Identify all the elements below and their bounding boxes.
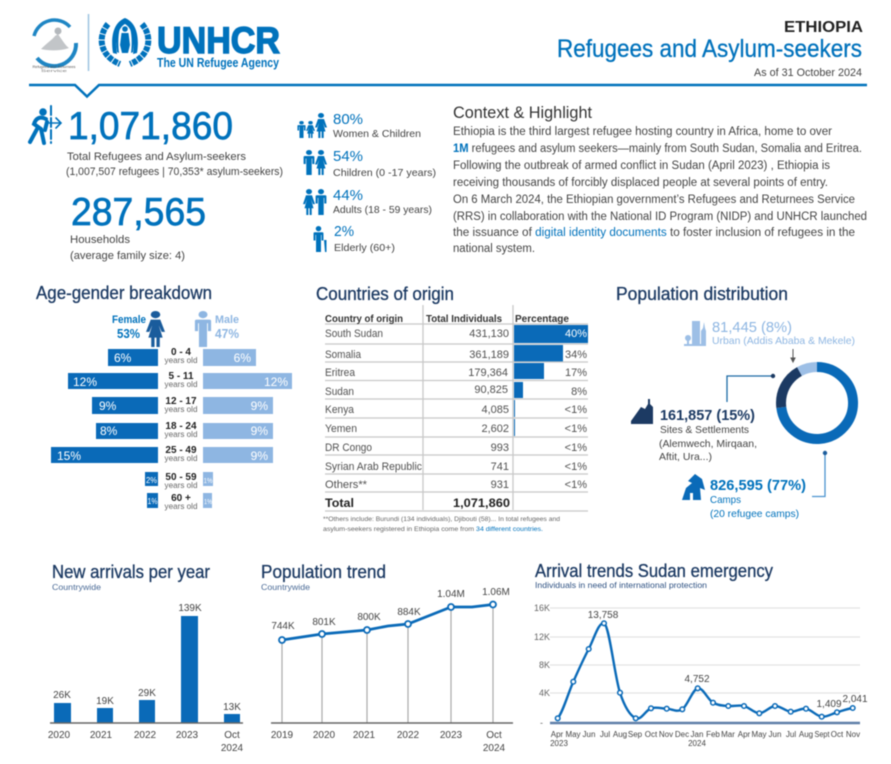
bar chart: arrivals: 2024 [221, 743, 244, 754]
stat: elderly [334, 223, 395, 254]
heading: population trend [261, 562, 386, 592]
icon: camps [682, 474, 705, 500]
logo: refugees and returnees service: Refugees and Returnees [32, 64, 76, 69]
table rows: 361,189 [469, 349, 509, 361]
table rows: Yemen [325, 423, 357, 435]
heading: new arrivals: New arrivals per year [52, 562, 210, 582]
female bars [51, 349, 158, 508]
line chart: population [271, 587, 513, 754]
context and highlight text: On 6 March 2024, the Ethiopian government’s Refugees and Returnees Service [453, 194, 855, 206]
line chart: sudan arrivals: Dec [675, 730, 689, 739]
stat: children: 54% [333, 148, 363, 165]
heading: new arrivals: Countrywide [52, 583, 102, 592]
bar chart: arrivals: 26K [53, 690, 71, 701]
bar chart: arrivals: 19K [96, 696, 114, 707]
panel: population trend [261, 562, 513, 754]
logo: UNHCR emblem [102, 18, 148, 64]
table rows: <1% [565, 404, 587, 416]
logo: UNHCR wordmark: The UN Refugee Agency [157, 56, 279, 70]
label: sites and settlements: Sites & Settlements [660, 424, 749, 436]
table rows: Somalia [325, 349, 362, 361]
line chart: population: 884K [397, 607, 421, 618]
table rows: 40% [565, 328, 587, 340]
bar chart: arrivals: 2021 [90, 730, 113, 741]
line chart: sudan arrivals [534, 603, 868, 748]
label: urban: Urban (Addis Ababa & Mekele) [712, 335, 855, 347]
table grid [325, 305, 588, 511]
table rows: Total [325, 496, 354, 510]
table rows: 431,130 [469, 328, 509, 340]
line chart: sudan arrivals: - [540, 718, 543, 728]
line chart: sudan arrivals: 2023 [550, 739, 568, 748]
table header: Country of origin [325, 313, 403, 325]
table rows: 17% [565, 367, 587, 379]
bar values: 1% [204, 478, 212, 485]
table header: Total Individuals [426, 313, 502, 325]
title block: ETHIOPIA [784, 19, 863, 36]
age group labels: years old [164, 480, 198, 490]
bar values: 9% [251, 399, 268, 413]
table rows [325, 328, 587, 510]
bar values: 12% [73, 375, 97, 389]
line chart: sudan arrivals: Feb [706, 730, 720, 739]
label: camps: Camps [710, 494, 741, 506]
line chart: sudan arrivals: 4K [539, 688, 550, 698]
stat: women and children [333, 111, 421, 140]
context and highlight text [453, 103, 867, 255]
table bars [514, 325, 588, 436]
age group labels: years old [164, 379, 198, 389]
bar values: 2% [146, 476, 157, 485]
age group labels: 60 + [171, 493, 191, 504]
table header [325, 313, 569, 325]
age group labels: years old [164, 404, 198, 414]
context and highlight text: receiving thousands of forcibly displaced people at several points of entry. [453, 177, 828, 189]
stat: total refugees and asylum-seekers: (1,007,507 refugees | 70,353* asylum-seekers) [66, 166, 283, 178]
panel: age-gender breakdown [36, 283, 292, 511]
context and highlight text: Following the outbreak of armed conflict in Sudan (April 2023) , Ethiopia is [453, 160, 830, 172]
title block: Refugees and Asylum-seekers [557, 35, 862, 63]
panel: population distribution [616, 284, 855, 520]
bar chart: arrivals: Oct [224, 730, 240, 741]
line chart: sudan arrivals: 2024 [688, 739, 706, 748]
line chart: sudan arrivals: 12K [534, 632, 550, 642]
stat: women and children: Women & Children [333, 128, 421, 140]
legend: male [195, 311, 239, 347]
line chart: sudan arrivals: Nov [659, 730, 673, 739]
line chart: sudan arrivals: Jun [769, 730, 781, 739]
table rows: Syrian Arab Republic [325, 461, 422, 473]
legend: male: Male [215, 314, 239, 326]
label: urban [712, 319, 855, 347]
leader: sites [727, 374, 775, 402]
line chart: sudan arrivals: Aug [613, 730, 627, 739]
context and highlight text: Context & Highlight [453, 103, 592, 122]
age group labels: 12 - 17 [165, 396, 197, 407]
table rows: <1% [565, 423, 587, 435]
label: urban: 81,445 (8%) [712, 319, 792, 336]
icon: urban buildings [684, 321, 706, 346]
bar values: 8% [100, 424, 118, 438]
line chart: population: 800K [357, 612, 381, 623]
line chart: sudan arrivals: 4,752 [684, 674, 710, 685]
logo: refugees and returnees service [32, 20, 76, 73]
line chart: population: 2020 [313, 730, 336, 741]
line chart: sudan arrivals: 2,041 [842, 694, 868, 705]
table rows: South Sudan [325, 328, 383, 340]
age group labels: 5 - 11 [168, 371, 194, 382]
line chart: population: 2021 [353, 730, 376, 741]
bar values: 6% [114, 351, 132, 365]
bar chart: arrivals: 139K [178, 603, 202, 614]
icon: person crossing a border [30, 106, 61, 143]
bar chart: arrivals: 2023 [176, 730, 199, 741]
age group labels: 25 - 49 [165, 445, 197, 456]
context and highlight text: 1M refugees and asylum seekers—mainly from South Sudan, Somalia and Eritrea. [453, 143, 862, 155]
line chart: population: 1.06M [482, 587, 510, 598]
bar chart: arrivals: 29K [138, 688, 156, 699]
label: sites and settlements [659, 407, 757, 463]
leader: camps [812, 451, 827, 496]
bar values [57, 351, 288, 506]
context and highlight text: (RRS) in collaboration with the National ID Program (NIDP) and UNHCR launched [453, 211, 867, 223]
line chart: population: 744K [271, 621, 295, 632]
line chart: population: 2019 [271, 730, 294, 741]
stat: households: (average family size: 4) [70, 250, 185, 262]
table rows: Others** [325, 479, 368, 491]
stat: children: Children (0 -17 years) [333, 167, 436, 179]
context and highlight text: national system. [453, 243, 535, 255]
stat: total refugees and asylum-seekers: Total Refugees and Asylum-seekers [67, 151, 247, 163]
table rows: <1% [565, 479, 587, 491]
table footnote: asylum-seekers registered in Ethiopia come from 34 different countries. [323, 526, 543, 533]
line chart: sudan arrivals: Apr [551, 730, 564, 739]
bar chart: arrivals [48, 603, 244, 754]
label: sites and settlements: Aftit, Ura...) [659, 451, 712, 463]
bar values: 9% [251, 424, 268, 438]
context and highlight text: the issuance of digital identity documents to foster inclusion of refugees in the [453, 227, 855, 239]
line chart: sudan arrivals: Jul [600, 730, 610, 739]
bar values: 9% [251, 449, 268, 463]
stat: total refugees and asylum-seekers [66, 105, 283, 178]
table rows: 2,602 [481, 423, 509, 435]
stat: elderly: Elderly (60+) [334, 242, 395, 254]
table rows: 931 [491, 479, 509, 491]
heading: new arrivals [52, 562, 210, 592]
stat: households: 287,565 [71, 191, 206, 234]
table header: Percentage [515, 313, 569, 325]
icon: women and children [297, 113, 327, 138]
label: camps: (20 refugee camps) [710, 508, 799, 520]
table rows: Sudan [325, 386, 354, 398]
line chart: sudan arrivals: Oct [645, 730, 658, 739]
line chart: population: 801K [312, 617, 336, 628]
bar chart: arrivals: 2020 [48, 730, 71, 741]
stat: total refugees and asylum-seekers: 1,071,860 [68, 105, 233, 148]
age group labels: years old [164, 429, 198, 439]
heading: arrival trends: Arrival trends Sudan emergency [535, 561, 773, 581]
line chart: sudan arrivals: Jul [786, 730, 796, 739]
line chart: sudan arrivals: Jan [691, 730, 703, 739]
line chart: population: Oct [486, 730, 502, 741]
age group labels: years old [164, 355, 198, 365]
label: sites and settlements: 161,857 (15%) [660, 407, 755, 424]
line chart: sudan arrivals: Jun [583, 730, 595, 739]
line chart: sudan arrivals: Oct [831, 730, 844, 739]
title block [557, 19, 863, 79]
line chart: sudan arrivals: 8K [539, 660, 550, 670]
legend: female: 53% [117, 326, 140, 341]
legend: female [112, 311, 165, 347]
line chart: population: 2024 [483, 743, 506, 754]
logo: UNHCR wordmark: UNHCR [157, 20, 280, 61]
age group labels: years old [164, 501, 198, 511]
heading: age-gender breakdown: Age-gender breakdown [36, 283, 212, 303]
stat: elderly: 2% [334, 223, 354, 240]
bar values: 12% [264, 375, 288, 389]
table rows: <1% [565, 442, 587, 454]
table rows: Eritrea [325, 367, 356, 379]
title block: As of 31 October 2024 [754, 67, 862, 79]
age group labels: 0 - 4 [171, 347, 191, 358]
line chart: sudan arrivals: May [751, 730, 767, 739]
line chart: population: 2022 [397, 730, 420, 741]
line chart: sudan arrivals: Nov [846, 730, 860, 739]
legend: female: Female [112, 314, 146, 326]
line chart: sudan arrivals: Mar [721, 730, 735, 739]
stat: children [333, 148, 436, 179]
line chart: sudan arrivals: Sept [814, 730, 830, 739]
table rows: 741 [491, 461, 509, 473]
bar chart: arrivals: 13K [223, 702, 241, 713]
stat: households [70, 191, 206, 262]
line chart: sudan arrivals: Sep [628, 730, 643, 739]
table rows: 1,071,860 [453, 496, 510, 510]
age group labels [164, 347, 198, 511]
bar values: 9% [99, 399, 117, 413]
male bars [203, 349, 292, 508]
stat: adults [333, 187, 432, 216]
table rows: 90,825 [474, 384, 508, 396]
table rows: 8% [571, 386, 587, 398]
bar values: 15% [57, 449, 81, 463]
line chart: population: 2023 [440, 730, 463, 741]
legend: male: 47% [215, 326, 239, 341]
icon: sites and settlements [631, 399, 653, 424]
heading: population distribution: Population distribution [616, 284, 788, 304]
heading: population trend: Population trend [261, 562, 386, 582]
header rule with chevron [29, 85, 867, 96]
bar values: 1% [148, 497, 158, 506]
label: sites and settlements: (Alemwech, Mirqaan, [659, 438, 757, 450]
table footnote: **Others include: Burundi (134 individuals), Djibouti (58)... In total refugees and [323, 516, 560, 523]
panel: new arrivals per year [48, 562, 244, 754]
logo: refugees and returnees service: Service [41, 69, 67, 73]
label: camps: 826,595 (77%) [710, 477, 806, 494]
line chart: sudan arrivals: May [565, 730, 581, 739]
table rows: DR Congo [325, 442, 372, 454]
line chart: population: 1.04M [437, 589, 465, 600]
table rows: 34% [565, 349, 587, 361]
donut chart [781, 367, 853, 439]
icon: elderly [314, 226, 326, 252]
label: camps [710, 477, 806, 520]
table rows: 4,085 [481, 404, 509, 416]
table rows: 993 [491, 442, 509, 454]
icon: adults [303, 189, 326, 215]
table footnote [323, 516, 560, 533]
line chart: sudan arrivals: 16K [534, 603, 550, 613]
context and highlight text: Ethiopia is the third largest refugee hosting country in Africa, home to over [453, 126, 832, 138]
bar chart: arrivals: 2022 [134, 730, 157, 741]
line chart: sudan arrivals: Apr [738, 730, 751, 739]
age group labels: 50 - 59 [165, 472, 197, 483]
table rows: 179,364 [468, 367, 508, 379]
bar values: 6% [234, 351, 251, 365]
heading: arrival trends: Individuals in need of international protection [535, 580, 707, 590]
table rows: Kenya [325, 404, 355, 416]
age group labels: years old [164, 453, 198, 463]
bar values: 1% [204, 499, 212, 506]
panel: countries of origin [316, 284, 588, 533]
icon: children [304, 150, 327, 175]
age group labels: 18 - 24 [165, 421, 197, 432]
line chart: sudan arrivals: 1,409 [816, 699, 842, 710]
table rows: <1% [565, 461, 587, 473]
line chart: sudan arrivals: 13,758 [588, 610, 619, 621]
heading: arrival trends [535, 561, 773, 590]
stat: adults: 44% [333, 187, 363, 204]
heading: population trend: Countrywide [261, 583, 311, 592]
stat: adults: Adults (18 - 59 years) [333, 204, 432, 216]
stat: women and children: 80% [333, 111, 363, 128]
line chart: sudan arrivals: Aug [799, 730, 813, 739]
stat: households: Households [70, 234, 131, 246]
panel: arrival trends sudan emergency [534, 561, 868, 748]
heading: countries of origin: Countries of origin [316, 284, 454, 304]
arrow: urban to donut [791, 349, 795, 362]
